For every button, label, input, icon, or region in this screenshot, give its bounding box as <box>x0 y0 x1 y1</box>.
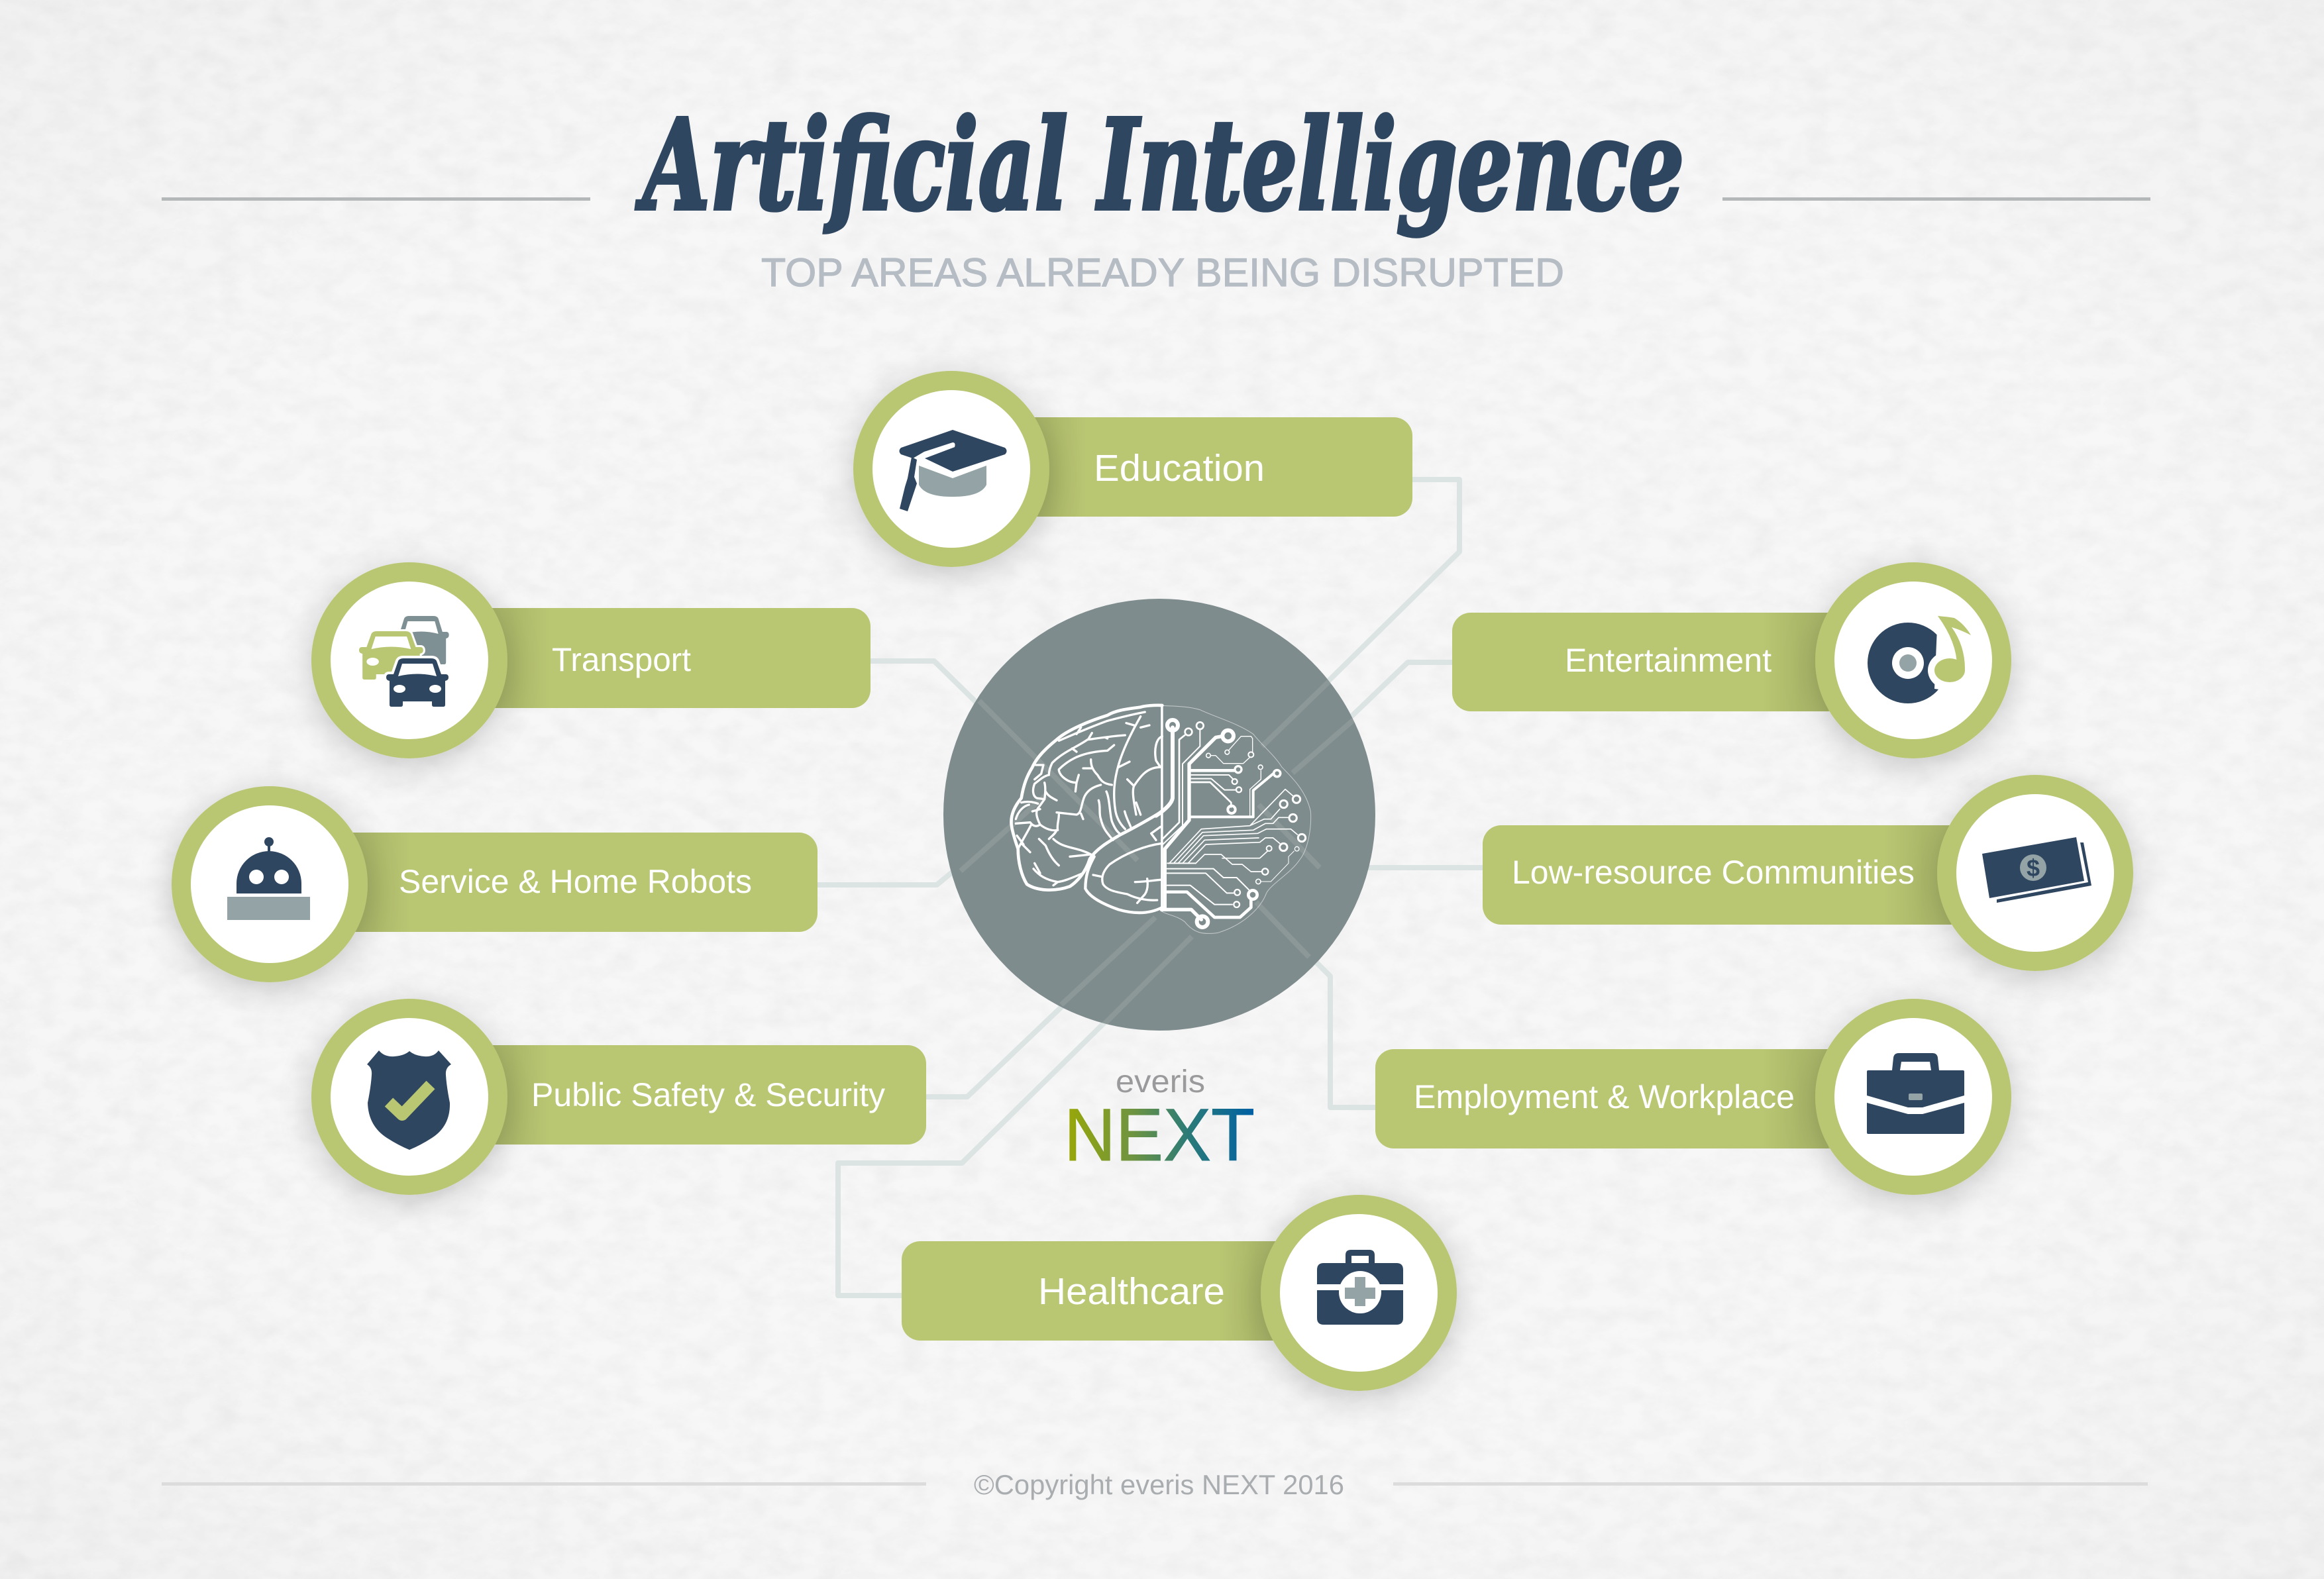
icon: shield <box>367 1050 451 1150</box>
logo: everis NEXT: NEXT <box>1064 1094 1255 1176</box>
title: Artificial Intelligence <box>636 92 1684 238</box>
label: Education: Education <box>1094 447 1265 489</box>
header rule: left <box>162 197 590 201</box>
label: Public Safety & Security: Public Safety & Security <box>531 1076 885 1113</box>
icon: banknotes: $ <box>2027 854 2040 882</box>
brain: organic left half <box>1011 705 1162 913</box>
item: Public Safety & Security <box>311 999 926 1195</box>
item: Healthcare <box>902 1195 1457 1391</box>
icon: robot <box>227 837 310 920</box>
item: Employment & Workplace <box>1375 999 2011 1195</box>
item: Transport <box>311 562 871 758</box>
icon: graduation cap <box>900 430 1007 511</box>
label: Transport: Transport <box>552 641 691 678</box>
item: Service & Home Robots <box>172 786 818 982</box>
central circle <box>943 599 1375 1031</box>
label: Low-resource Communities: Low-resource Communities <box>1512 854 1915 891</box>
copyright: ©Copyright everis NEXT 2016 <box>974 1469 1344 1500</box>
item: Entertainment <box>1452 562 2011 758</box>
label: Healthcare: Healthcare <box>1038 1270 1225 1313</box>
subtitle: TOP AREAS ALREADY BEING DISRUPTED <box>761 250 1564 295</box>
brain: circuit right half <box>1156 705 1311 933</box>
header rule: right <box>1722 197 2150 201</box>
icon: disc and music note <box>1868 613 1972 703</box>
icon: banknotes <box>1982 837 2091 903</box>
icon: cars <box>359 616 449 707</box>
label: Service & Home Robots: Service & Home Robots <box>399 863 752 900</box>
footer rule: right <box>1393 1482 2148 1486</box>
item: Education <box>853 371 1412 567</box>
connector lines <box>818 480 1483 1296</box>
footer rule: left <box>162 1482 926 1486</box>
label: Entertainment: Entertainment <box>1565 642 1771 679</box>
icon: briefcase <box>1867 1053 1964 1134</box>
connector lines seen through central circle <box>961 682 1353 1026</box>
icon: medical kit <box>1317 1250 1403 1325</box>
label: Employment & Workplace: Employment & Workplace <box>1414 1078 1795 1115</box>
logo: everis NEXT: everis <box>1116 1064 1205 1099</box>
item: Low-resource Communities <box>1483 775 2133 971</box>
